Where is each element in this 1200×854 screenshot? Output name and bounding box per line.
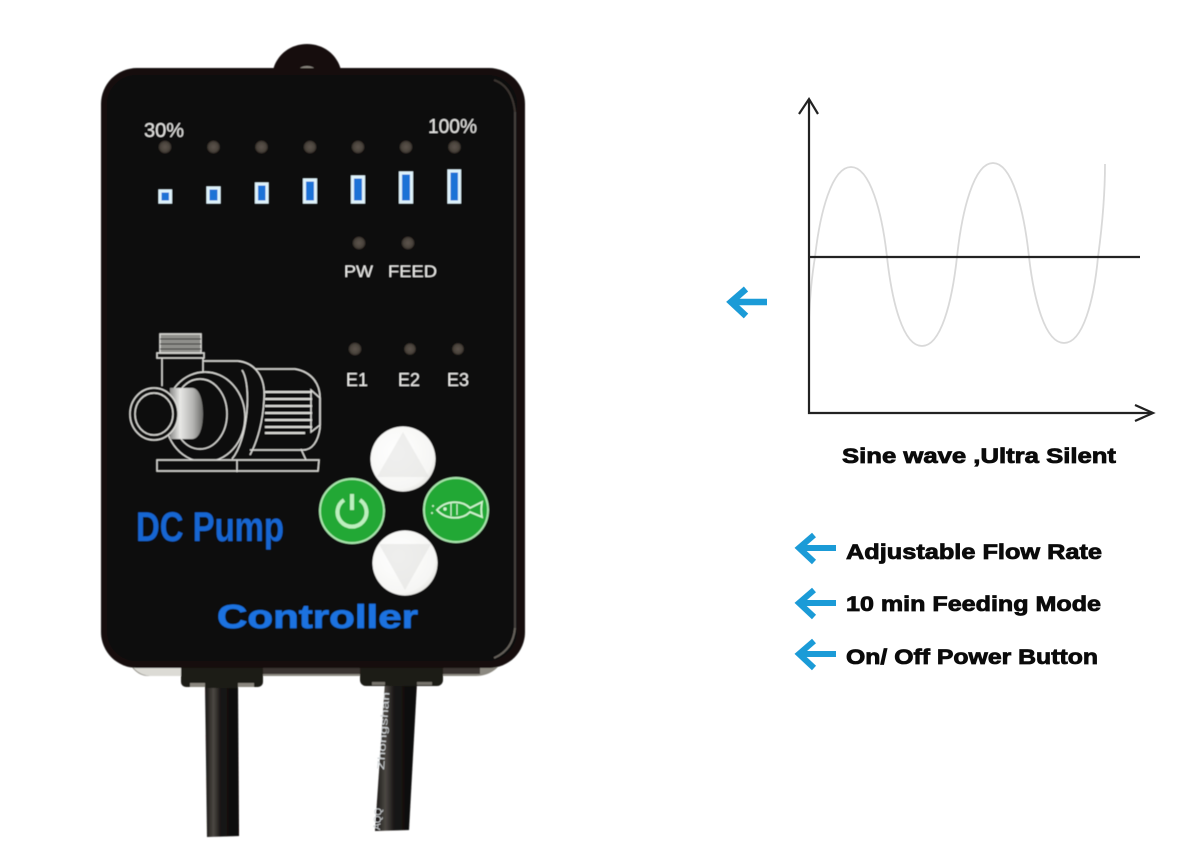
right cable xyxy=(372,682,417,831)
sine curve xyxy=(809,163,1105,346)
feature: power button xyxy=(799,641,1098,669)
feature: feeding mode xyxy=(799,590,1101,617)
label: Controller: Controller xyxy=(217,598,418,635)
right cable: Zhongshan xyxy=(376,692,392,770)
chart: sine wave xyxy=(799,99,1153,421)
midline xyxy=(809,256,1140,258)
label: 100%: 100% xyxy=(428,116,477,138)
icon: pump line drawing xyxy=(130,334,320,472)
housing body xyxy=(101,68,525,668)
feature: adjustable flow rate: Adjustable Flow Rate xyxy=(846,541,1102,564)
right cable collar xyxy=(360,662,443,686)
label: DC Pump: DC Pump xyxy=(136,503,284,550)
caption: sine wave: Sine wave ,Ultra Silent xyxy=(842,445,1116,468)
feature: feeding mode: 10 min Feeding Mode xyxy=(846,593,1101,616)
arrow xyxy=(799,590,836,617)
axes xyxy=(799,99,1153,421)
controller device xyxy=(101,44,525,837)
level indicator LEDs xyxy=(158,140,461,154)
button: up xyxy=(370,426,436,492)
PW and FEED indicators xyxy=(344,236,437,281)
right cable: AQQ xyxy=(372,807,385,830)
left cable xyxy=(205,682,239,837)
arrow: to sine wave xyxy=(731,289,767,316)
E1 E2 E3 indicators: E2 xyxy=(398,369,420,390)
level bars xyxy=(160,171,460,202)
arrow xyxy=(799,535,836,562)
left cable collar xyxy=(181,664,263,688)
E1 E2 E3 indicators xyxy=(346,342,469,390)
E1 E2 E3 indicators: E1 xyxy=(346,369,368,390)
button: feed xyxy=(424,478,488,542)
feature: adjustable flow rate xyxy=(799,535,1102,564)
button: power xyxy=(320,479,384,543)
E1 E2 E3 indicators: E3 xyxy=(447,369,469,390)
label: 30%: 30% xyxy=(144,120,184,142)
arrow xyxy=(799,641,836,668)
underside of housing xyxy=(126,655,506,676)
PW and FEED indicators: FEED xyxy=(388,262,437,281)
feature: power button: On/ Off Power Button xyxy=(846,646,1098,669)
PW and FEED indicators: PW xyxy=(344,262,373,281)
hanging tab xyxy=(273,44,341,70)
button: down xyxy=(372,530,438,596)
